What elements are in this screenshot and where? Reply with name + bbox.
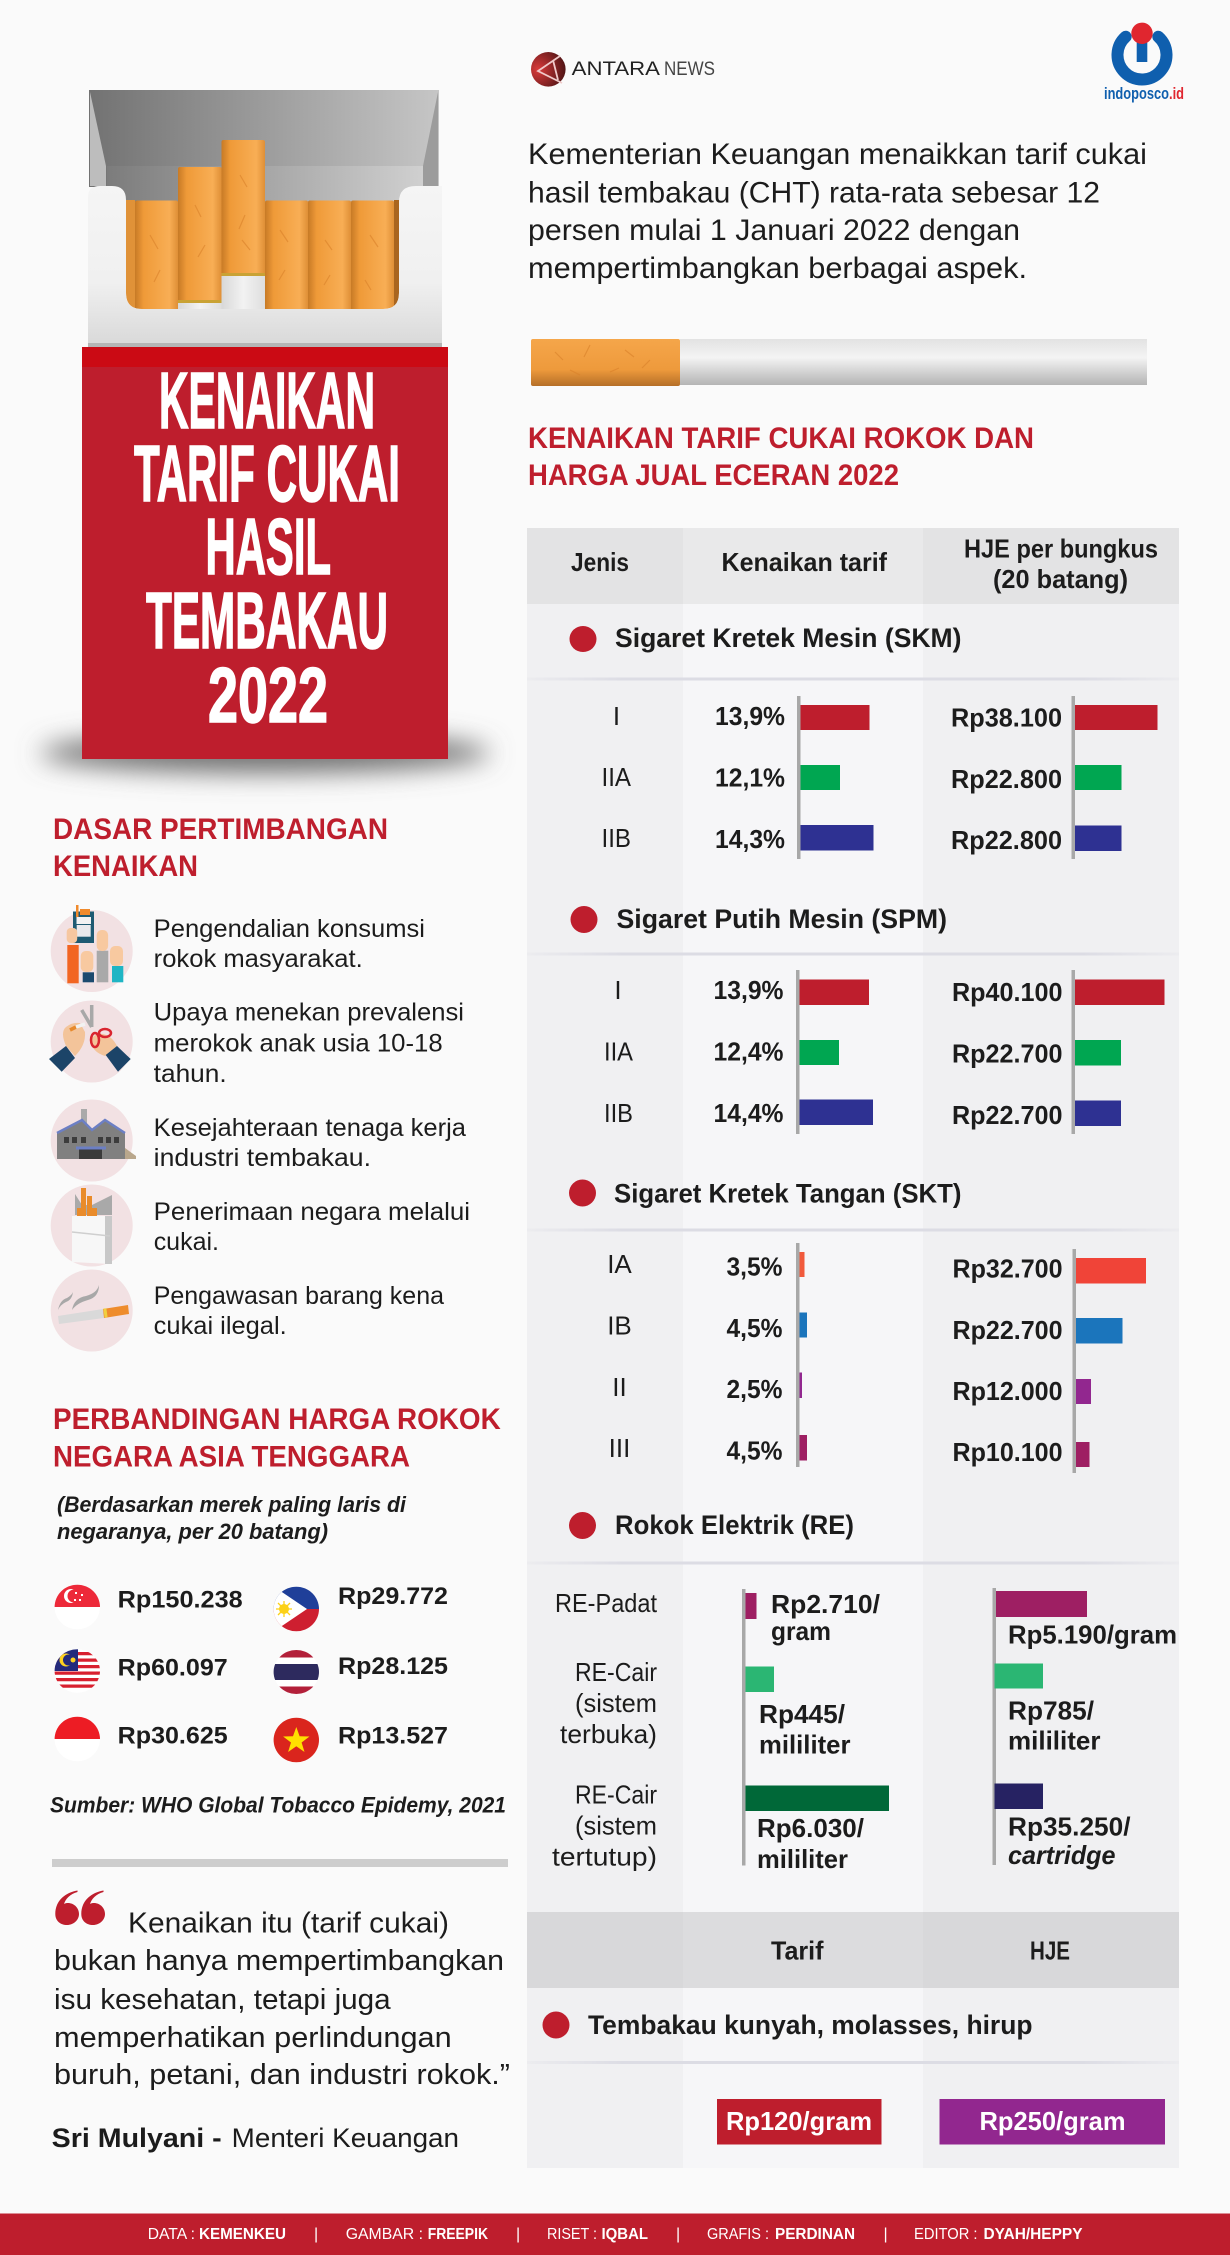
tarif box <box>717 2099 882 2144</box>
text: pengendalian <box>154 915 425 973</box>
bar chart: RE tarif: Rp445/ <box>759 1699 845 1729</box>
bar chart: RE tarif: gram <box>771 1616 831 1646</box>
footer credits: GRAFIS : <box>707 2226 769 2243</box>
row labels SKT: IA <box>607 1249 632 1279</box>
panel: red title box <box>82 347 448 759</box>
bar chart: SKT HJE: Rp22.700 <box>952 1315 1062 1345</box>
second table header: HJE <box>1030 1936 1070 1966</box>
bar chart: SKT tarif: 4,5% <box>726 1436 782 1466</box>
bar chart: RE HJE: mililiter <box>1008 1726 1100 1756</box>
row labels SPM: IIA <box>604 1036 634 1066</box>
text: pengawasan: cukai ilegal. <box>154 1312 287 1340</box>
text: pengendalian: Pengendalian konsumsi <box>154 915 425 943</box>
Vietnam price: Rp13.527 <box>338 1722 448 1750</box>
footer credits: IQBAL <box>602 2226 648 2243</box>
footer credits: DATA : <box>148 2226 195 2243</box>
intro text: hasil tembakau (CHT) rata-rata sebesar 12 <box>528 176 1100 210</box>
bar chart: SKM HJE: Rp22.800 <box>951 825 1062 855</box>
bar chart: SKM HJE: Rp38.100 <box>951 702 1062 732</box>
section: SPM: Sigaret Putih Mesin (SPM) <box>616 904 947 934</box>
HJE box: Rp250/gram <box>980 2106 1126 2136</box>
bar chart: SPM HJE: Rp22.700 <box>952 1100 1062 1130</box>
row labels RE: RE-Cair <box>575 1657 657 1687</box>
bar chart: SPM tarif: 12,4% <box>714 1036 784 1066</box>
text: upaya: tahun. <box>154 1060 227 1088</box>
quote text: bukan hanya mempertimbangkan <box>54 1945 504 1977</box>
section: SKT: Sigaret Kretek Tangan (SKT) <box>614 1178 962 1208</box>
bar chart: SKM HJE: Rp22.800 <box>951 764 1062 794</box>
intro text: mempertimbangkan berbagai aspek. <box>528 252 1027 285</box>
bar chart: RE tarif <box>742 1589 889 1874</box>
title: HASIL <box>206 502 331 591</box>
bar chart: SKT tarif: 3,5% <box>726 1252 782 1282</box>
row labels RE: RE-Cair <box>575 1780 657 1810</box>
row labels SKM: IIA <box>602 762 632 792</box>
table header: HJE per bungkus <box>964 534 1158 564</box>
bar chart: RE HJE: cartridge <box>1008 1840 1116 1870</box>
icon: flag Vietnam <box>274 1718 319 1762</box>
icon: hands and bars <box>51 905 133 992</box>
source note: Sumber: WHO Global Tobacco Epidemy, 2021 <box>50 1792 506 1818</box>
row labels SPM <box>604 975 634 1128</box>
heading: dasar pertimbangan <box>53 813 388 883</box>
footer credits <box>148 2226 1083 2243</box>
bar chart: SPM HJE: Rp22.700 <box>952 1038 1062 1068</box>
footer credits: FREEPIK <box>428 2226 488 2243</box>
text: upaya: Upaya menekan prevalensi <box>154 998 464 1026</box>
icon: cigarette pack <box>51 1184 133 1266</box>
heading: dasar pertimbangan: KENAIKAN <box>53 850 198 883</box>
row labels SKT: III <box>609 1433 630 1463</box>
row labels SKM <box>602 701 632 853</box>
icon: flag Singapore <box>54 1584 100 1607</box>
footer credits: EDITOR : <box>914 2226 978 2243</box>
section: SKM: Sigaret Kretek Mesin (SKM) <box>615 623 962 653</box>
footer credits: PERDINAN <box>775 2226 855 2243</box>
icon: pack lid <box>89 90 439 202</box>
divider <box>52 1859 508 1867</box>
row labels RE: (sistem <box>575 1688 657 1718</box>
icon: long cigarette bar <box>531 339 1147 386</box>
footer credits: | <box>516 2226 520 2243</box>
quote attribution: Sri Mulyani - <box>52 2123 222 2153</box>
heading: dasar pertimbangan: DASAR PERTIMBANGAN <box>53 813 388 846</box>
text: kesejahteraan: Kesejahteraan tenaga kerja <box>154 1114 466 1142</box>
HJE box <box>940 2099 1165 2144</box>
bar chart: RE tarif: mililiter <box>757 1844 848 1874</box>
bar chart: SPM HJE <box>952 970 1164 1134</box>
icon: quotation mark <box>55 1890 105 1925</box>
title: 2022 <box>208 651 328 739</box>
bar chart: RE tarif: Rp2.710/ <box>771 1589 880 1619</box>
text: pengawasan <box>154 1282 444 1340</box>
heading: table <box>528 422 1034 492</box>
row labels SKT: II <box>612 1372 627 1402</box>
bar chart: SKT tarif: 4,5% <box>726 1313 782 1343</box>
bar chart: RE tarif: Rp6.030/ <box>757 1813 864 1843</box>
footer credits: | <box>314 2226 318 2243</box>
bar chart: SKM tarif: 14,3% <box>715 824 785 854</box>
section: SPM <box>527 904 1179 1134</box>
Singapore price: Rp150.238 <box>118 1586 243 1614</box>
title: TARIF CUKAI <box>134 429 400 518</box>
bar chart: SPM tarif: 14,4% <box>714 1098 784 1128</box>
quote attribution: Menteri Keuangan <box>232 2123 459 2153</box>
bar chart: RE tarif: mililiter <box>759 1730 850 1760</box>
note: berdasarkan merek <box>57 1492 407 1544</box>
icon: flag Philippines <box>273 1586 320 1632</box>
text: kesejahteraan <box>154 1114 466 1172</box>
table header: Kenaikan tarif <box>722 547 887 577</box>
footer credits: KEMENKEU <box>199 2226 286 2243</box>
section: RE: Rokok Elektrik (RE) <box>615 1510 854 1540</box>
icon: pack body <box>88 186 442 347</box>
intro text <box>528 138 1147 285</box>
Indonesia price: Rp30.625 <box>118 1722 228 1750</box>
Malaysia price: Rp60.097 <box>118 1654 228 1682</box>
icon: cutting cigarette <box>49 1000 133 1082</box>
table background columns <box>527 528 1179 2168</box>
section: RE <box>527 1510 1179 1874</box>
bar chart: RE HJE: Rp5.190/gram <box>1008 1620 1177 1650</box>
second table header: Tarif <box>771 1936 824 1966</box>
footer credits: RISET : <box>547 2226 597 2243</box>
icon: flag Thailand <box>273 1650 320 1694</box>
pack shadow <box>40 733 490 773</box>
bar chart: SKT HJE: Rp32.700 <box>952 1254 1062 1284</box>
table header: Jenis <box>571 547 629 577</box>
row labels SPM: I <box>614 975 622 1005</box>
bar chart: RE HJE: Rp35.250/ <box>1008 1812 1130 1842</box>
bar chart: SPM HJE: Rp40.100 <box>952 977 1062 1007</box>
text: penerimaan: Penerimaan negara melalui <box>154 1198 470 1226</box>
row labels RE <box>552 1588 658 1872</box>
section: SKT <box>527 1178 1179 1473</box>
icon: flag Malaysia <box>54 1649 100 1688</box>
text: penerimaan: cukai. <box>154 1228 219 1256</box>
text: upaya: merokok anak usia 10-18 <box>154 1030 443 1058</box>
panel: dasar pertimbangan list <box>49 905 470 1352</box>
bar chart: RE HJE <box>992 1588 1177 1870</box>
logo: indoposco.id <box>1104 23 1184 103</box>
intro text: persen mulai 1 Januari 2022 dengan <box>528 214 1020 247</box>
bar chart: SPM tarif <box>714 970 873 1134</box>
footer credits: | <box>676 2226 680 2243</box>
panel: country price comparison <box>54 1583 448 1762</box>
row labels SKM: IIB <box>602 823 631 853</box>
quote text: Kenaikan itu (tarif cukai) <box>128 1908 449 1940</box>
note: berdasarkan merek: negaranya, per 20 batang) <box>57 1519 328 1544</box>
row labels SKT <box>607 1249 632 1463</box>
heading: perbandingan harga: NEGARA ASIA TENGGARA <box>53 1440 410 1474</box>
quote text: memperhatikan perlindungan <box>54 2022 452 2054</box>
row labels RE: terbuka) <box>560 1719 657 1749</box>
icon: burning cigarette <box>51 1270 133 1352</box>
text: penerimaan <box>154 1198 470 1256</box>
row labels RE: (sistem <box>575 1810 657 1840</box>
text: upaya <box>154 998 464 1088</box>
bar chart: SKM tarif <box>715 696 874 859</box>
title: TEMBAKAU <box>146 576 388 665</box>
section: tembakau kunyah: Tembakau kunyah, molasses, hirup <box>588 2010 1032 2040</box>
title: KENAIKAN <box>159 356 375 445</box>
heading: table: HARGA JUAL ECERAN 2022 <box>528 459 899 492</box>
quote attribution <box>52 2123 459 2153</box>
bar chart: SKT tarif <box>726 1243 807 1467</box>
Thailand price: Rp28.125 <box>338 1653 448 1680</box>
row labels SKT: IB <box>607 1310 632 1340</box>
text: pengawasan: Pengawasan barang kena <box>154 1282 444 1310</box>
row labels SPM: IIB <box>604 1098 633 1128</box>
row labels RE: RE-Padat <box>555 1588 658 1618</box>
icon: flag Indonesia <box>54 1716 100 1739</box>
quote text <box>54 1908 510 2091</box>
heading: perbandingan harga: PERBANDINGAN HARGA ROKOK <box>53 1403 501 1436</box>
table header: (20 batang) <box>993 564 1128 594</box>
bar chart: SKT HJE: Rp12.000 <box>952 1376 1062 1406</box>
bar chart: SKT HJE <box>952 1249 1146 1473</box>
bar chart: SKT HJE: Rp10.100 <box>952 1437 1062 1467</box>
row labels SKM: I <box>613 701 620 731</box>
tarif box: Rp120/gram <box>726 2106 872 2136</box>
icon: factory <box>51 1100 136 1182</box>
footer credits: | <box>884 2226 888 2243</box>
bar chart: SKM HJE <box>951 696 1158 859</box>
panel: quote <box>52 1890 510 2153</box>
quote text: buruh, petani, dan industri rokok.” <box>54 2059 510 2091</box>
note: berdasarkan merek: (Berdasarkan merek paling laris di <box>57 1492 407 1517</box>
bar chart: SKT tarif: 2,5% <box>726 1374 782 1404</box>
bar chart: RE HJE: Rp785/ <box>1008 1696 1094 1726</box>
footer <box>0 2214 1230 2255</box>
logo: Antara News: ANTARA <box>572 59 660 80</box>
second table header <box>527 1912 1179 1988</box>
panel: tariff table <box>527 528 1179 2168</box>
logo: indoposco.id: .id <box>1169 84 1184 103</box>
text: kesejahteraan: industri tembakau. <box>154 1144 371 1172</box>
heading: table: KENAIKAN TARIF CUKAI ROKOK DAN <box>528 422 1034 455</box>
footer credits: GAMBAR : <box>346 2226 423 2243</box>
table header <box>527 528 1179 604</box>
panel: cigarette pack title <box>40 90 490 773</box>
logo: Antara News: NEWS <box>664 59 715 80</box>
intro text: Kementerian Keuangan menaikkan tarif cukai <box>528 138 1147 171</box>
quote text: isu kesehatan, tetapi juga <box>54 1984 392 2016</box>
section: tembakau kunyah <box>527 2010 1179 2144</box>
logo: indoposco.id: indoposco <box>1104 84 1169 103</box>
title <box>134 356 400 739</box>
logo: Antara News <box>531 52 715 87</box>
heading: perbandingan harga <box>53 1403 501 1474</box>
Philippines price: Rp29.772 <box>338 1583 448 1610</box>
pack base line <box>88 343 442 347</box>
bar chart: SKM tarif: 13,9% <box>715 701 785 731</box>
row labels RE: tertutup) <box>552 1842 657 1872</box>
bar chart: SKM tarif: 12,1% <box>715 762 785 792</box>
footer credits: DYAH/HEPPY <box>984 2226 1083 2243</box>
bar chart: SPM tarif: 13,9% <box>714 975 784 1005</box>
red top band <box>82 347 448 367</box>
icon: cigarettes <box>126 140 399 310</box>
text: pengendalian: rokok masyarakat. <box>154 945 363 973</box>
section: SKM <box>527 623 1179 859</box>
